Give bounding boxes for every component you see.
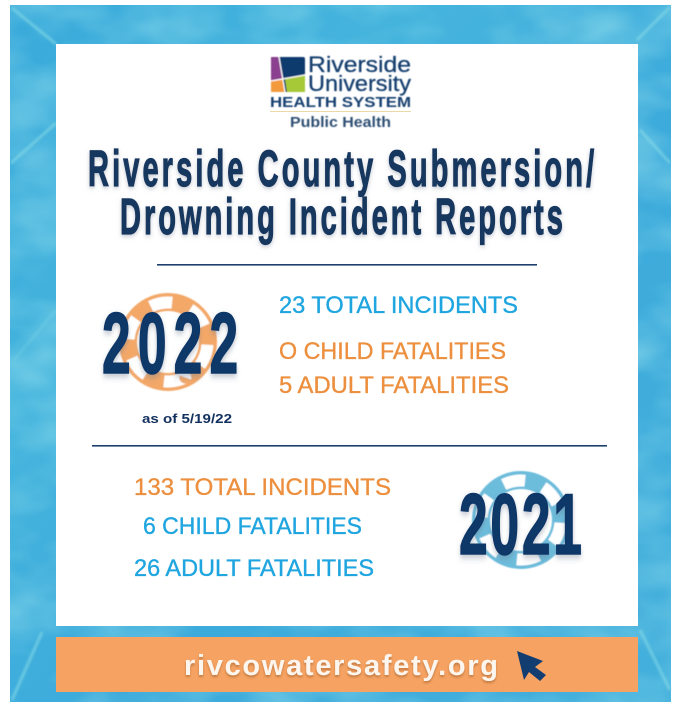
logo wordmark: Riverside: [308, 52, 411, 77]
icon: cursor arrow: [517, 651, 546, 681]
badge: 2022 life ring: [102, 289, 238, 426]
divider lower: [92, 445, 607, 447]
logo: Riverside University Health System: [270, 52, 411, 131]
stats 2022: 5 ADULT FATALITIES: [279, 372, 509, 399]
logo: Riverside University Health System: University: [308, 71, 411, 96]
title: Drowning Incident Reports: [120, 187, 563, 245]
icon: blue life ring: [468, 467, 574, 573]
icon: orange life ring: [115, 289, 221, 395]
banner: website link: [56, 637, 638, 692]
stats 2021: 26 ADULT FATALITIES: [134, 555, 374, 582]
title: [88, 139, 594, 245]
stats 2022: 23 TOTAL INCIDENTS: [279, 292, 518, 319]
stats 2022: O CHILD FATALITIES: [279, 338, 506, 365]
logo: Riverside University Health System: HEALTH SYSTEM: [270, 95, 411, 111]
title: Riverside County Submersion/: [88, 139, 594, 197]
year 2022: 2022: [102, 297, 238, 392]
logo: Riverside University Health System: Public Health: [290, 115, 391, 131]
stats 2021: [134, 474, 391, 582]
icon: logo mark: [271, 57, 305, 92]
website url: rivcowatersafety.org: [184, 650, 498, 682]
stats 2022: [279, 292, 518, 399]
badge: 2021 life ring: [459, 467, 582, 573]
panel: white content card: [56, 44, 638, 626]
stats 2021: 6 CHILD FATALITIES: [143, 513, 362, 540]
stats 2021: 133 TOTAL INCIDENTS: [134, 474, 391, 501]
divider upper: [157, 264, 537, 266]
as-of date note: as of 5/19/22: [142, 411, 232, 426]
year 2021: 2021: [459, 478, 582, 573]
